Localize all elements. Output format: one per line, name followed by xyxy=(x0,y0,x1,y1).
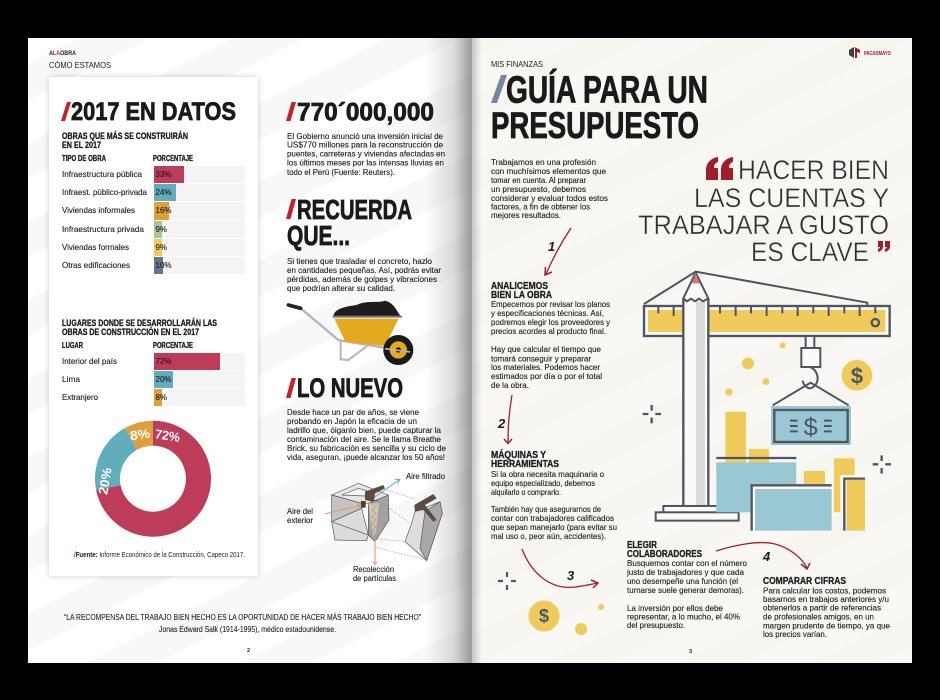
section: lo nuevo xyxy=(286,373,446,583)
table header: lugar: LUGAR xyxy=(62,341,83,350)
text block: concreto: pérdidas, además de golpes y vibraciones xyxy=(287,274,437,284)
crane base xyxy=(656,506,739,521)
subheading: obras: EN EL 2017 xyxy=(62,140,101,150)
text block: comparar cifras: Para calcular los costos, podemos xyxy=(763,586,886,596)
heading: recuerda que: RECUERDA xyxy=(297,194,412,225)
logo: pacasmayo xyxy=(849,47,891,58)
icon: wheelbarrow xyxy=(288,301,413,365)
text block: elegir colaboradores: ELEGIR xyxy=(627,540,658,551)
page number: 3: 3 xyxy=(689,649,692,655)
text block: comparar cifras: de profesionales amigos, en un xyxy=(763,612,874,622)
donut chart xyxy=(95,421,211,537)
bar chart: tipos de obra: Infraest. público-privada xyxy=(62,188,148,197)
text block: concreto: que podrían alterar su calidad. xyxy=(287,283,395,293)
building outlines xyxy=(716,458,865,531)
text block: intro: factores, a fin de obtener los xyxy=(491,202,590,212)
blue block back xyxy=(716,462,796,512)
subheading: lugares: OBRAS DE CONSTRUCCIÓN EN EL 2017 xyxy=(62,326,199,337)
text block: máquinas y herramientas: equipo especializado, debemos xyxy=(491,478,595,488)
arrow: step 1 xyxy=(545,228,571,275)
bar chart: lugares: Lima xyxy=(62,375,81,384)
bar chart: lugares: Interior del país xyxy=(62,357,117,366)
section label: a la obra: ALAOBRA xyxy=(49,51,77,57)
text block: intro xyxy=(491,157,608,220)
title: guía para un presupuesto: PRESUPUESTO xyxy=(491,105,699,146)
table header: tipo de obra: TIPO DE OBRA xyxy=(62,154,106,163)
text block: gobierno: puentes, carreteras y viviendas afectadas en xyxy=(287,148,445,158)
text block: intro: un presupuesto, debemos xyxy=(491,184,586,194)
subheading: obras xyxy=(62,131,188,150)
heading: lo nuevo: LO NUEVO xyxy=(297,373,403,403)
dollar coin xyxy=(842,360,872,391)
pull quote xyxy=(638,155,890,267)
diagram: breathe brick: exterior xyxy=(287,516,313,525)
illustration: pencil crane with money xyxy=(643,272,891,531)
bar chart: lugares: Extranjero xyxy=(62,393,99,402)
heading: recuerda que: QUE... xyxy=(287,220,350,251)
crane ruler arm xyxy=(644,306,890,336)
text block: elegir colaboradores: Busquemos contar con el número xyxy=(627,558,747,568)
text block: breathe brick: ladrillo que, óiganlo bien, puede capturar la xyxy=(287,425,441,435)
source note: /Fuente: Informe Económico de la Construcción, Capeco 2017. xyxy=(74,550,245,559)
text block: máquinas y herramientas: contar con trabajadores calificados xyxy=(491,513,614,523)
heading: 770 000 000: 770´000,000 xyxy=(297,98,434,126)
icon: opening quote marks xyxy=(706,157,733,180)
text block: máquinas y herramientas: También hay que asegurarnos de xyxy=(491,504,601,514)
diagram: breathe brick: de partículas xyxy=(353,574,396,583)
icon: sparkle left xyxy=(498,572,516,590)
text block: máquinas y herramientas: que sepan manejarlo (para evitar su xyxy=(491,522,617,532)
text block: analicemos: los materiales. Podemos hacer xyxy=(491,362,600,372)
icon: closing quote marks xyxy=(878,241,890,252)
diagram: breathe brick: Recolección xyxy=(353,565,394,574)
text block: intro: tomar en cuenta. Al preparar xyxy=(491,175,586,185)
subheading: lugares: LUGARES DONDE SE DESARROLLARÁN LAS xyxy=(62,318,217,328)
text block: comparar cifras xyxy=(763,575,890,639)
bar chart: tipos de obra: Otras edificaciones xyxy=(62,261,130,270)
decorative coins xyxy=(575,604,604,635)
arrow: step 3 xyxy=(522,549,598,588)
bar chart: tipos de obra: 9% xyxy=(156,243,167,252)
text block: máquinas y herramientas: HERRAMIENTAS xyxy=(491,459,559,470)
bar chart: tipos de obra: Viviendas formales xyxy=(62,243,129,252)
section label: a la obra xyxy=(49,51,111,70)
text block: máquinas y herramientas: Si la obra necesita maquinaria o xyxy=(491,469,604,479)
icon: dollar coin: $ xyxy=(539,606,549,626)
heading: lo nuevo xyxy=(286,373,403,403)
bar chart: tipos de obra: 9% xyxy=(156,225,167,234)
arrow: step 4 xyxy=(716,543,810,569)
text block: comparar cifras: COMPARAR CIFRAS xyxy=(763,575,846,587)
table header: tipo de obra xyxy=(62,154,193,163)
text block: intro: con muchísimos elementos que xyxy=(491,166,606,176)
text block: breathe brick: Brick, su fabricación es sencilla y su ciclo de xyxy=(287,443,446,453)
text block: comparar cifras: los precios varían. xyxy=(763,629,827,639)
page number: 2: 2 xyxy=(247,648,250,654)
text block: elegir colaboradores: COLABORADORES xyxy=(627,549,702,560)
text block: gobierno: US$770 millones para la reconstrucción de xyxy=(287,140,443,150)
quote: jonas salk: “LA RECOMPENSA DEL TRABAJO BIEN HECHO ES LA OPORTUNIDAD DE HACER MÁS TRABAJO BIEN HECHO” xyxy=(64,612,421,622)
dollar coin: $ xyxy=(851,363,863,388)
section: recuerda que xyxy=(286,194,441,365)
diagram: breathe brick xyxy=(287,472,446,583)
heading: 2017 en datos: 2017 EN DATOS xyxy=(71,98,236,126)
text block: analicemos: podremos elegir los proveedores y xyxy=(491,317,611,327)
arrow: step 3: 3 xyxy=(567,568,575,583)
text block: máquinas y herramientas xyxy=(491,448,617,541)
bar chart: lugares xyxy=(62,353,245,406)
text block: elegir colaboradores: del presupuesto. xyxy=(627,620,685,630)
text block: comparar cifras: margen prudente de tiempo, ya que xyxy=(763,620,890,630)
section label: mis finanzas: MIS FINANZAS xyxy=(491,60,543,69)
text block: intro: considerar y evaluar todos estos xyxy=(491,193,608,203)
bar chart: tipos de obra: 10% xyxy=(156,261,172,270)
pull quote: LAS CUENTAS Y xyxy=(694,183,889,213)
bar chart: tipos de obra: Viviendas informales xyxy=(62,206,135,215)
title: guía para un presupuesto xyxy=(491,68,708,146)
text block: gobierno xyxy=(287,131,445,177)
quote: jonas salk xyxy=(64,612,421,634)
text block: analicemos: estimados por día o por el total xyxy=(491,371,602,381)
panel: left page background xyxy=(28,38,472,663)
text block: máquinas y herramientas: mal uso o, peor aún, accidentes). xyxy=(491,531,606,541)
arrow: step 2 xyxy=(497,395,512,444)
bar chart: lugares: 20% xyxy=(156,375,172,384)
money bill xyxy=(771,406,851,445)
text block: analicemos: ANALICEMOS xyxy=(491,281,548,292)
bar chart: tipos de obra: Infraestructura privada xyxy=(62,225,145,234)
donut chart: 8% xyxy=(129,426,151,443)
arrow: step 4: 4 xyxy=(762,549,771,564)
front block backing xyxy=(751,484,832,531)
text block: analicemos: de la obra. xyxy=(491,380,529,390)
text block: analicemos: tomará conseguir y preparar xyxy=(491,354,591,364)
text block: comparar cifras: basarnos en trabajos anteriores y/u xyxy=(763,594,889,604)
text block: concreto xyxy=(287,256,441,293)
bar chart: lugares: 72% xyxy=(156,357,172,366)
icon: dollar coin xyxy=(528,600,560,632)
text block: breathe brick: vida, aseguran, ¡puede alcanzar los 50 años! xyxy=(287,452,445,462)
text block: gobierno: El Gobierno anunció una inversión inicial de xyxy=(287,131,443,141)
yellow blocks xyxy=(725,412,865,531)
bar chart: tipos de obra: Infraestructura pública xyxy=(62,170,143,179)
text block: analicemos: BIEN LA OBRA xyxy=(491,290,552,301)
logo: pacasmayo: PACASMAYO xyxy=(864,51,891,57)
text block: máquinas y herramientas: MÁQUINAS Y xyxy=(491,448,546,461)
text block: breathe brick: Desde hace un par de años, se viene xyxy=(287,407,419,417)
text block: analicemos xyxy=(491,281,611,390)
table header: tipo de obra: PORCENTAJE xyxy=(153,154,193,163)
bar chart: tipos de obra: 33% xyxy=(156,170,172,179)
text block: intro: mejores resultados. xyxy=(491,210,561,220)
text block: máquinas y herramientas: alquilarlo o comprarlo. xyxy=(491,487,561,497)
diagram: breathe brick: Aire filtrado xyxy=(406,472,446,481)
text block: gobierno: todo el Perú (Fuente: Reuters). xyxy=(287,167,395,177)
crane cables xyxy=(644,272,867,306)
arrow: step 2: 2 xyxy=(497,416,506,431)
text block: analicemos: Empecemos por revisar los planos xyxy=(491,299,610,309)
pull quote: TRABAJAR A GUSTO xyxy=(638,210,889,240)
hook xyxy=(773,336,849,405)
bar chart: tipos de obra: 24% xyxy=(156,188,172,197)
pull quote: ES CLAVE xyxy=(751,237,869,267)
money bill: $ xyxy=(804,413,818,441)
panel: right page background xyxy=(472,38,912,663)
text block: intro: Trabajamos en una profesión xyxy=(491,157,596,167)
title: guía para un presupuesto: GUÍA PARA UN xyxy=(506,68,708,112)
text block: elegir colaboradores: turnarse suele generar demoras). xyxy=(627,585,744,595)
pull quote: HACER BIEN xyxy=(738,155,889,185)
section label: a la obra: CÓMO ESTAMOS xyxy=(49,60,111,70)
text block: elegir colaboradores: uno desempeñe una función (el xyxy=(627,576,738,586)
text block: analicemos: Hay que calcular el tiempo que xyxy=(491,344,601,354)
subheading: obras: OBRAS QUE MÁS SE CONSTRUIRÁN xyxy=(62,131,188,141)
sparkles xyxy=(643,405,891,474)
text block: concreto: en cantidades pequeñas. Así, podrás evitar xyxy=(287,265,441,275)
text block: comparar cifras: obtenerlos a partir de referencias xyxy=(763,602,881,612)
donut chart: 20% xyxy=(95,466,115,496)
text block: analicemos: precios acordes al producto final. xyxy=(491,326,606,336)
front blue block xyxy=(755,489,832,531)
text block: breathe brick: contaminación del aire. Se le llama Breathe xyxy=(287,434,441,444)
table header: lugar: PORCENTAJE xyxy=(153,341,193,350)
arrow: step 1: 1 xyxy=(548,239,555,254)
text block: elegir colaboradores: La inversión por ellos debe xyxy=(627,603,723,613)
donut chart: 72% xyxy=(154,426,181,445)
text block: breathe brick xyxy=(287,407,446,462)
heading: recuerda que xyxy=(286,194,412,251)
text block: gobierno: los últimos meses por las intensas lluvias en xyxy=(287,158,444,168)
text block: breathe brick: probando en Japón la eficacia de un xyxy=(287,416,417,426)
pencil tower xyxy=(683,273,708,507)
decorative coins xyxy=(725,342,786,396)
table header: lugar xyxy=(62,341,193,350)
bar chart: lugares: 8% xyxy=(156,393,167,402)
text block: elegir colaboradores: representar, a lo mucho, el 40% xyxy=(627,612,741,622)
text block: elegir colaboradores xyxy=(626,540,747,630)
section: 770 millones xyxy=(286,98,445,177)
bar chart: tipos de obra xyxy=(62,166,245,274)
diagram: breathe brick: Aire del xyxy=(287,507,313,516)
text block: concreto: Si tienes que trasladar el concreto, hazlo xyxy=(287,256,432,266)
text block: analicemos: y especificaciones técnicas. Así, xyxy=(491,308,604,318)
panel: 2017 en datos card xyxy=(49,77,258,576)
text block: elegir colaboradores: justo de trabajadores y que cada xyxy=(626,567,744,577)
quote: jonas salk: Jonas Edward Salk (1914-1995), médico estadounidense. xyxy=(159,624,336,634)
subheading: lugares xyxy=(62,318,217,337)
bar chart: tipos de obra: 16% xyxy=(156,206,172,215)
